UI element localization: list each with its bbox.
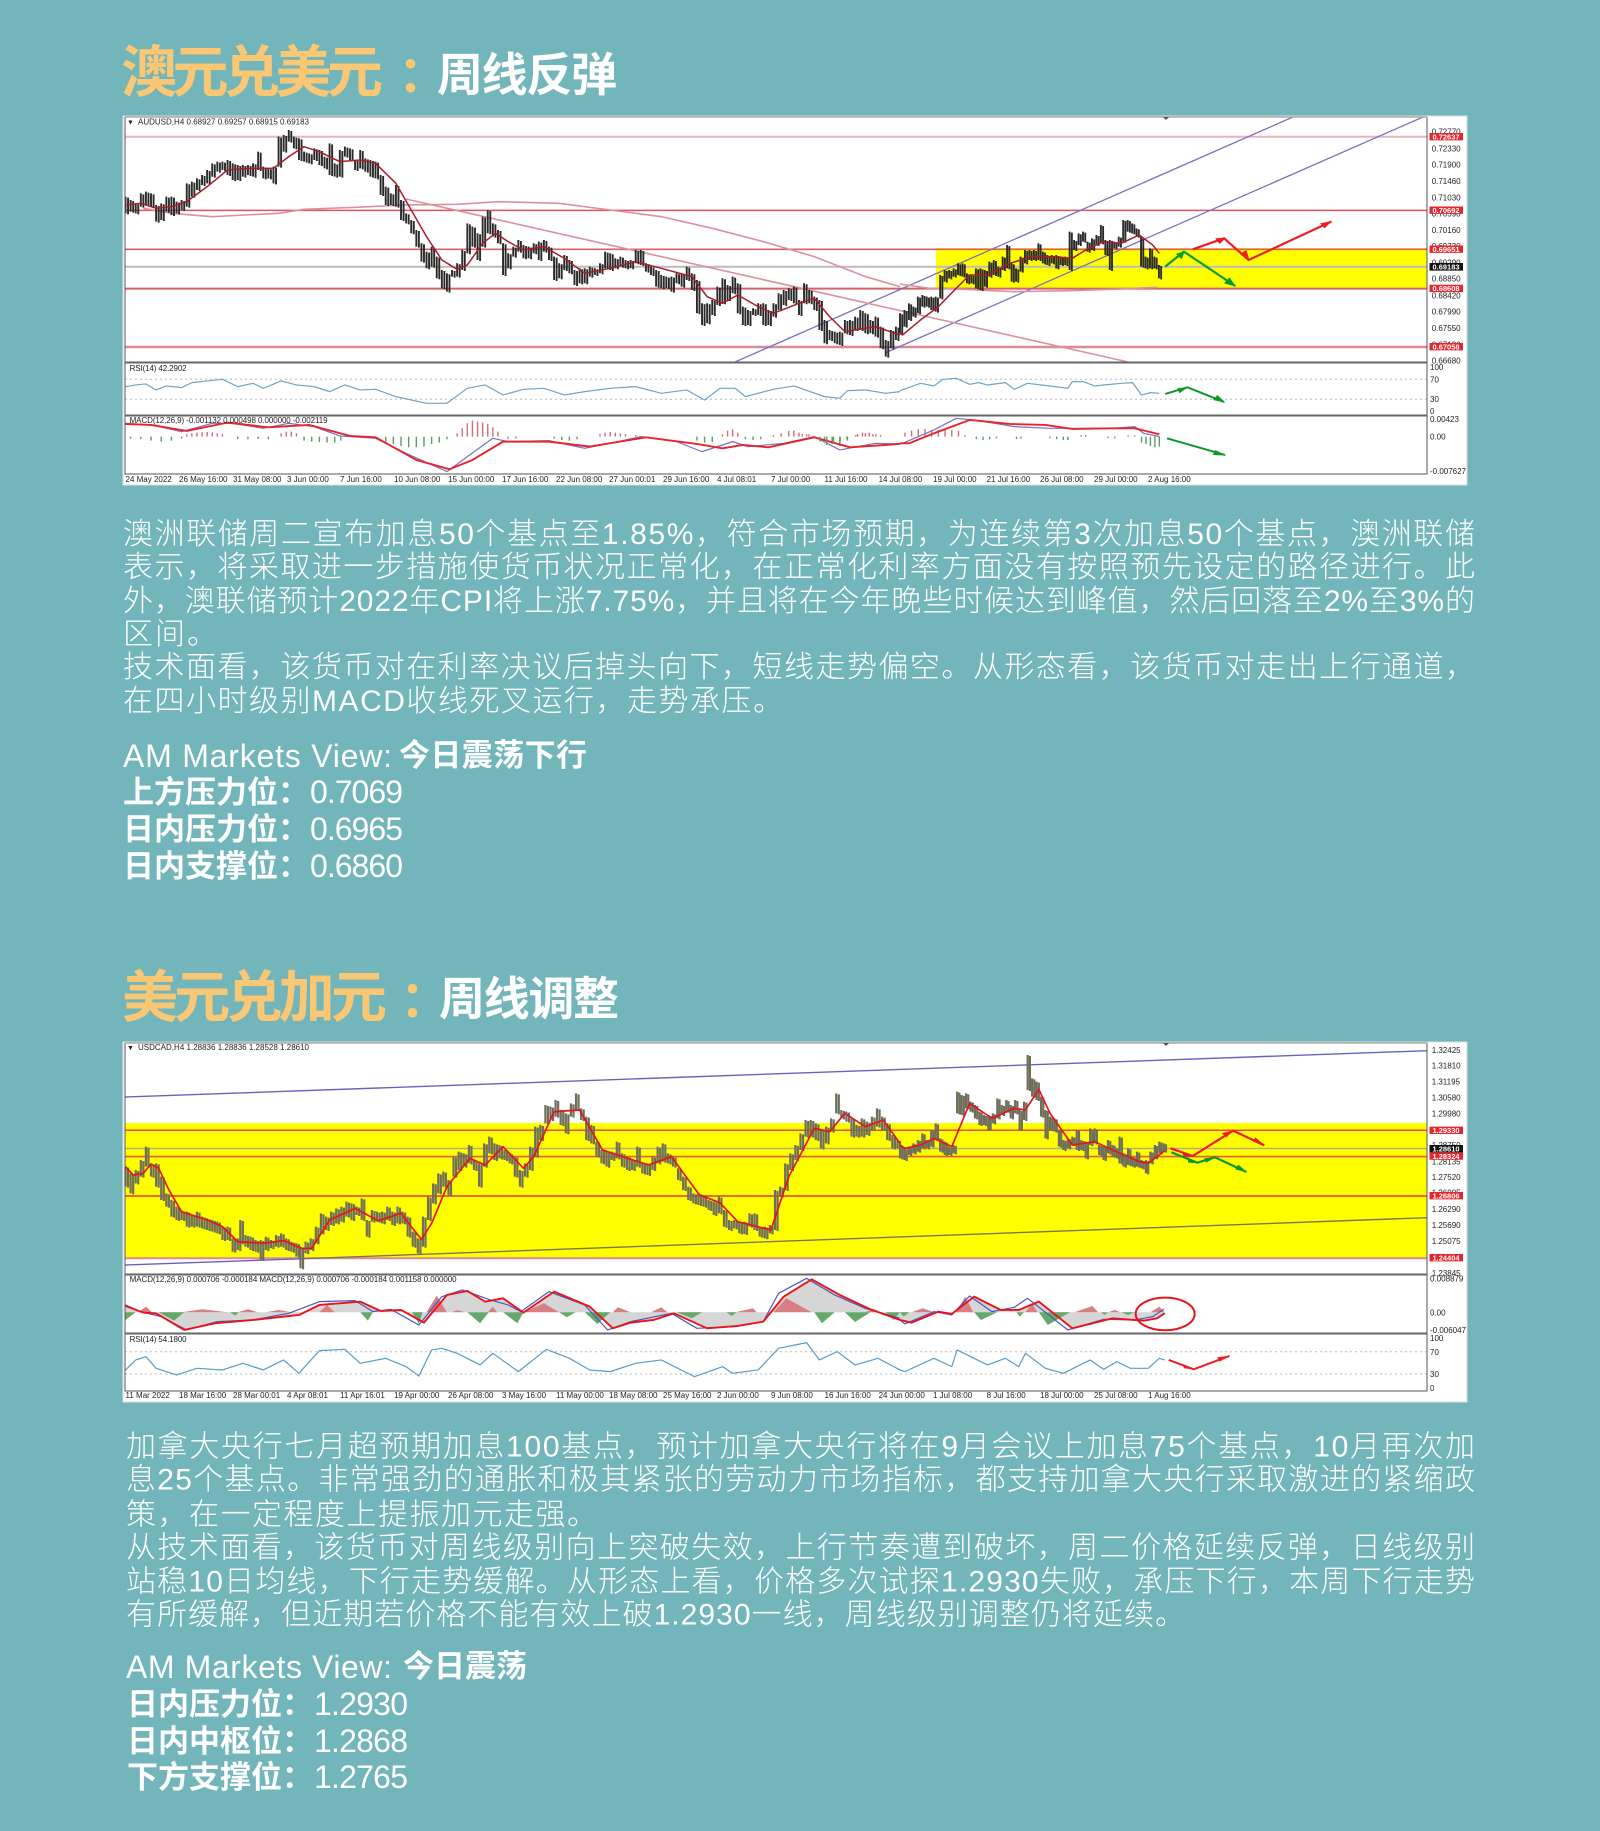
body text: AUD/USD analysis [123, 518, 1475, 718]
date axis: 2 Jun 00:00 [717, 1391, 759, 1400]
date axis: 8 Jul 16:00 [987, 1391, 1026, 1400]
date axis: 31 May 08:00 [233, 475, 282, 484]
price axis labels: 0.008879 [1430, 1274, 1464, 1283]
price tags [1430, 132, 1463, 352]
date axis: 11 May 00:00 [556, 1391, 604, 1400]
section heading: AUD/USD: 周线反弹 [437, 49, 617, 101]
price axis labels: 0 [1430, 1384, 1435, 1393]
price axis labels: 1.29980 [1432, 1110, 1461, 1119]
date axis: 4 Jul 08:01 [717, 475, 757, 484]
date axis: 3 Jun 00:00 [287, 475, 329, 484]
price tags: 1.29330 [1432, 1126, 1460, 1135]
date axis: 16 Jun 16:00 [824, 1391, 871, 1400]
date axis: 25 May 16:00 [663, 1391, 712, 1400]
price axis labels: 1.28135 [1432, 1158, 1461, 1167]
date axis: 28 Mar 00:01 [233, 1391, 281, 1400]
price axis labels: 0.70160 [1432, 226, 1461, 235]
price axis labels: 1.25690 [1432, 1221, 1461, 1230]
price tags: 1.28324 [1432, 1152, 1460, 1161]
date axis: 3 May 16:00 [502, 1391, 547, 1400]
chart legends: ▼ [127, 1045, 134, 1052]
market view: AUD/USD levels: 上方压力位： [123, 775, 309, 810]
candlesticks and moving average, main panel [126, 1055, 1166, 1269]
market view: AUD/USD levels: 日内压力位： [123, 812, 309, 847]
date axis: 18 Jul 00:00 [1040, 1391, 1084, 1400]
section heading: USD/CAD: 美元兑加元 [122, 966, 387, 1029]
chart: AUD/USD H4 [123, 116, 1467, 485]
horizontal price levels [125, 1130, 1427, 1258]
body text: USD/CAD analysis: 有所缓解，但近期若价格不能有效上破1.2930一线，周线级别调整仍将延续。 [126, 1598, 1185, 1632]
price axis labels: 0.69290 [1432, 258, 1461, 267]
panel frame lines [125, 117, 1427, 474]
candlesticks and moving averages, main panel [126, 130, 1161, 358]
horizontal price levels [125, 137, 1427, 347]
date axis: 18 Mar 16:00 [179, 1391, 227, 1400]
price axis labels [1430, 128, 1467, 476]
price axis labels: 1.27520 [1432, 1173, 1461, 1182]
market view: AUD/USD levels: 今日震荡下行 [399, 738, 587, 773]
chart: USD/CAD H4 [123, 1042, 1467, 1402]
callout: red circle on MACD [1136, 1298, 1195, 1330]
body text: AUD/USD analysis: 技术面看，该货币对在利率决议后掉头向下，短线走势偏空。从形态看，该货币对走出上行通道， [123, 651, 1475, 684]
body text: AUD/USD analysis: 表示，将采取进一步措施使货币状况正常化，在正常化利率方面没有按照预先设定的路径进行。此 [123, 551, 1475, 584]
price axis labels: 1.25075 [1432, 1237, 1461, 1246]
price tags: 1.26806 [1432, 1191, 1460, 1200]
price axis labels: 1.31810 [1432, 1062, 1461, 1071]
section heading: USD/CAD [122, 966, 619, 1029]
body text: USD/CAD analysis: 从技术面看，该货币对周线级别向上突破失效，上行节奏遭到破坏，周二价格延续反弹，日线级别 [126, 1532, 1475, 1564]
price axis labels: 1.28750 [1432, 1141, 1461, 1150]
date axis: 29 Jun 16:00 [663, 475, 710, 484]
section heading: AUD/USD: ： [398, 47, 448, 103]
market view: USD/CAD levels: 日内中枢位： [127, 1724, 313, 1759]
price axis labels: 0.67550 [1432, 324, 1461, 333]
price axis labels: 1.26905 [1432, 1189, 1461, 1198]
market view: AUD/USD levels: AM Markets View: [123, 738, 392, 774]
price axis labels: 0 [1430, 407, 1435, 416]
price axis labels: 0.72330 [1432, 144, 1461, 153]
market view: USD/CAD levels: 1.2765 [314, 1759, 408, 1795]
date axis: 2 Aug 16:00 [1148, 475, 1191, 484]
MACD panel [126, 1278, 1195, 1330]
market view: USD/CAD levels: 日内压力位： [127, 1687, 313, 1722]
date axis: 22 Jun 08:00 [556, 475, 603, 484]
price tags: 0.69651 [1432, 245, 1460, 254]
price axis labels: 0.66680 [1432, 357, 1461, 366]
section heading: AUD/USD: 澳元兑美元 [121, 41, 383, 104]
yellow range zone [936, 248, 1427, 288]
date axis: 11 Apr 16:01 [340, 1391, 385, 1400]
price axis labels: -0.007627 [1430, 467, 1467, 476]
price tags: 0.70692 [1432, 206, 1460, 215]
price axis labels: 0.00 [1430, 1308, 1446, 1317]
market view: USD/CAD levels [126, 1649, 527, 1795]
price axis labels: 70 [1430, 1348, 1439, 1357]
date axis: 4 Apr 08:01 [287, 1391, 328, 1400]
trend channel lines [406, 117, 1423, 362]
date axis [126, 1391, 1191, 1400]
price axis labels: 100 [1430, 363, 1444, 372]
price axis labels: 0.71030 [1432, 193, 1461, 202]
price axis labels: 0.70590 [1432, 209, 1461, 218]
price axis labels: 1.32425 [1432, 1046, 1461, 1055]
chart legends [127, 1043, 457, 1344]
date axis: 9 Jun 08:00 [771, 1391, 813, 1400]
date axis: 27 Jun 00:01 [609, 475, 656, 484]
RSI panel [125, 378, 1427, 403]
price axis labels: 1.26290 [1432, 1205, 1461, 1214]
price tags: 1.28610 [1432, 1144, 1460, 1153]
date axis [126, 475, 1191, 484]
date axis: 7 Jul 00:00 [771, 475, 811, 484]
price axis labels: 30 [1430, 395, 1439, 404]
forecast arrows, main panel [1171, 1130, 1265, 1172]
date axis: 21 Jul 16:00 [987, 475, 1031, 484]
date axis: 26 Jul 08:00 [1040, 475, 1084, 484]
chart legends: AUDUSD,H4 0.68927 0.69257 0.68915 0.69183 [138, 118, 310, 126]
chart legends: USDCAD,H4 1.28836 1.28836 1.28528 1.28610 [138, 1043, 310, 1052]
chart legends [127, 118, 328, 425]
price axis labels: 0.00423 [1430, 415, 1459, 424]
date axis: 7 Jun 16:00 [340, 475, 382, 484]
body text: AUD/USD analysis: 在四小时级别MACD收线死叉运行，走势承压。 [123, 685, 783, 718]
price tags [1430, 1126, 1463, 1262]
market view: AUD/USD levels: 0.6860 [310, 848, 403, 884]
panel frame lines [125, 1043, 1427, 1391]
date axis: 26 May 16:00 [179, 475, 228, 484]
chart legends: MACD(12,26,9) 0.000706 -0.000184 MACD(12,26,9) 0.000706 -0.000184 0.001158 0.000000 [130, 1275, 457, 1284]
MACD panel [126, 418, 1226, 472]
price axis labels: 1.23845 [1432, 1269, 1461, 1278]
price tags: 0.68608 [1432, 284, 1460, 293]
date axis: 24 May 2022 [126, 475, 172, 484]
chart legends: RSI(14) 54.1800 [130, 1335, 187, 1344]
body text: AUD/USD analysis: 外，澳联储预计2022年CPI将上涨7.75%，并且将在今年晚些时候达到峰值，然后回落至2%至3%的 [123, 585, 1475, 618]
chart background [123, 1042, 1467, 1402]
body text: USD/CAD analysis: 策，在一定程度上提振加元走强。 [126, 1498, 597, 1532]
date axis: 10 Jun 08:00 [394, 475, 441, 484]
section heading: USD/CAD: 周线调整 [439, 973, 619, 1025]
price tags: 0.72637 [1432, 132, 1460, 142]
market view: AUD/USD levels: 0.6965 [310, 811, 403, 847]
date axis: 29 Jul 00:00 [1094, 475, 1138, 484]
date axis: 18 May 08:00 [609, 1391, 658, 1400]
date axis: 19 Jul 00:00 [933, 475, 977, 484]
market view: AUD/USD levels: 0.7069 [310, 774, 403, 810]
date axis: 14 Jul 08:00 [879, 475, 923, 484]
price axis labels: 0.67120 [1432, 340, 1461, 349]
market view: USD/CAD levels: AM Markets View: [126, 1649, 392, 1685]
date axis: 26 Apr 08:00 [448, 1391, 494, 1400]
RSI panel [125, 1343, 1427, 1377]
RSI forecast arrow [1165, 387, 1225, 403]
price axis labels: 70 [1430, 375, 1439, 384]
body text: AUD/USD analysis: 澳洲联储周二宣布加息50个基点至1.85%，符合市场预期，为连续第3次加息50个基点，澳洲联储 [123, 518, 1475, 551]
section heading: AUD/USD [121, 41, 617, 104]
date axis: 25 Jul 08:00 [1094, 1391, 1138, 1400]
chart legends: ▼ [127, 120, 134, 126]
RSI forecast arrow [1169, 1356, 1230, 1370]
chart legends: MACD(12,26,9) -0.001132 0.000498 0.000000 -0.002119 [130, 416, 328, 425]
trend channel lines [126, 1051, 1427, 1265]
body text: USD/CAD analysis: 站稳10日均线，下行走势缓解。从形态上看，价格多次试探1.2930失败，承压下行，本周下行走势 [126, 1566, 1475, 1598]
date axis: 19 Apr 00:00 [394, 1391, 440, 1400]
date axis: 15 Jun 00:00 [448, 475, 495, 484]
section heading: USD/CAD: ： [400, 972, 450, 1028]
price tags: 0.67058 [1432, 342, 1460, 352]
date axis: 11 Mar 2022 [126, 1391, 170, 1400]
MACD forecast arrow [1167, 438, 1226, 456]
chart background [123, 116, 1467, 485]
body text: USD/CAD analysis: 加拿大央行七月超预期加息100基点，预计加拿大央行将在9月会议上加息75个基点，10月再次加 [126, 1430, 1475, 1464]
price axis labels: 0.68850 [1432, 275, 1461, 284]
body text: USD/CAD analysis [126, 1430, 1475, 1632]
price axis labels: 1.30580 [1432, 1094, 1461, 1103]
date axis: 24 Jun 00:00 [879, 1391, 925, 1400]
price axis labels: 0.68420 [1432, 291, 1461, 300]
price axis labels [1430, 1046, 1467, 1393]
price axis labels: 0.71900 [1432, 161, 1461, 170]
market view: USD/CAD levels: 1.2930 [314, 1686, 408, 1722]
market view: USD/CAD levels: 下方支撑位： [127, 1760, 313, 1795]
chart legends: RSI(14) 42.2902 [130, 364, 187, 373]
yellow range zone [126, 1123, 1427, 1258]
price axis labels: 1.31195 [1432, 1078, 1461, 1087]
body text: USD/CAD analysis: 息25个基点。非常强劲的通胀和极其紧张的劳动力市场指标，都支持加拿大央行采取激进的紧缩政 [126, 1464, 1475, 1496]
price axis labels: 100 [1430, 1334, 1444, 1343]
date axis: 1 Aug 16:00 [1148, 1391, 1191, 1400]
forecast arrows, main panel [1165, 221, 1332, 287]
price axis labels: 0.71460 [1432, 177, 1461, 186]
price axis labels: 0.72770 [1432, 128, 1461, 137]
price axis labels: 0.67990 [1432, 308, 1461, 317]
price tags: 0.69183 [1432, 263, 1460, 272]
date axis: 11 Jul 16:00 [824, 475, 868, 484]
price tags: 1.24404 [1432, 1253, 1460, 1262]
price axis labels: -0.006047 [1430, 1326, 1467, 1335]
market view: USD/CAD levels: 1.2868 [314, 1723, 408, 1759]
date axis: 17 Jun 16:00 [502, 475, 549, 484]
market view: AUD/USD levels: 日内支撑位： [123, 849, 309, 884]
price axis labels: 0.00 [1430, 433, 1446, 442]
body text: AUD/USD analysis: 区间。 [123, 618, 217, 651]
market view: AUD/USD levels [123, 738, 587, 884]
price axis labels: 30 [1430, 1370, 1439, 1379]
price axis labels: 0.69730 [1432, 242, 1461, 251]
date axis: 1 Jul 08:00 [933, 1391, 973, 1400]
market view: USD/CAD levels: 今日震荡 [403, 1649, 527, 1684]
